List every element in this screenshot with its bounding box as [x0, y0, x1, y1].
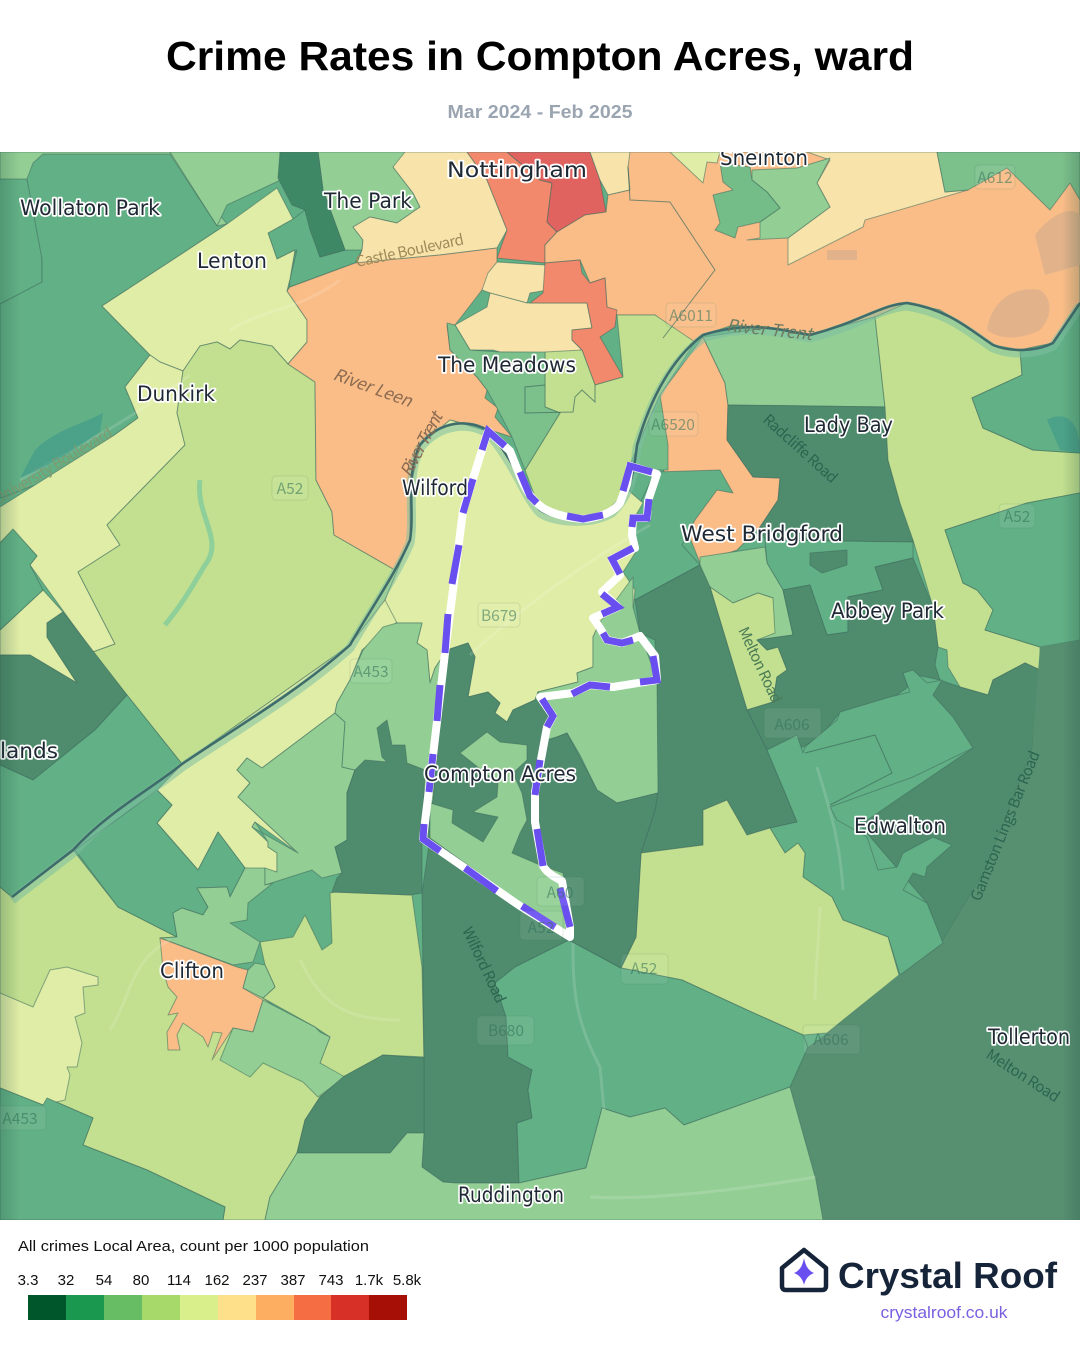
place labels: Clifton [160, 959, 224, 983]
place labels: Tollerton [987, 1025, 1070, 1049]
water: lakes and streams [20, 413, 1080, 625]
road and river names: Radcliffe Road [759, 409, 843, 488]
place labels: Abbey Park [831, 599, 945, 623]
website url: crystalroof.co.uk [880, 1304, 1008, 1322]
road badges: A612 [977, 166, 1013, 188]
road badges: A52 [528, 916, 554, 938]
road badges: A606 [774, 713, 810, 735]
road and river names: Wilford Road [457, 923, 511, 1006]
ward boundary: Compton Acres [423, 431, 657, 937]
legend value labels: 114 [167, 1272, 191, 1289]
road badges: A52 [277, 477, 303, 499]
road badges: A6011 [669, 304, 713, 326]
legend title: All crimes Local Area, count per 1000 population [18, 1238, 369, 1255]
place labels: Wilford [402, 476, 468, 500]
legend value labels [18, 1272, 422, 1289]
road badges: A606 [813, 1028, 849, 1050]
place labels [0, 146, 1070, 1207]
icon: house with star [782, 1250, 826, 1290]
place labels: Lady Bay [804, 413, 893, 437]
road and river names: Castle Boulevard [354, 228, 466, 272]
title: Crime Rates in Compton Acres, ward [166, 33, 914, 79]
river Trent [12, 303, 1080, 900]
place labels: Lenton [197, 249, 267, 273]
road badges: A453 [2, 1107, 38, 1129]
road and river names: River Trent [725, 311, 816, 345]
darker industrial patches [827, 211, 1080, 338]
road badges: A453 [353, 660, 389, 682]
road badges: B680 [488, 1019, 524, 1041]
legend value labels: 54 [96, 1272, 112, 1289]
place labels: Edwalton [854, 814, 946, 838]
road badges: A52 [1004, 505, 1030, 527]
road badges [0, 165, 1035, 1130]
place labels: West Bridgford [681, 522, 843, 546]
legend value labels: 162 [204, 1272, 230, 1289]
legend value labels: 3.3 [18, 1272, 38, 1289]
place labels: The Park [323, 189, 413, 213]
legend value labels: 1.7k [355, 1272, 384, 1289]
place labels: Nottingham [447, 158, 587, 182]
place labels: Dunkirk [137, 382, 216, 406]
road and river names: River Trent [392, 405, 448, 480]
legend value labels: 387 [280, 1272, 306, 1289]
place labels: Sneinton [720, 146, 808, 170]
logo: Crystal Roof [782, 1250, 1058, 1296]
legend value labels: 5.8k [393, 1272, 422, 1289]
road and river names: Melton Road [733, 623, 787, 706]
place labels: Ruddington [458, 1183, 564, 1207]
legend value labels: 237 [242, 1272, 268, 1289]
subtitle: date range: Mar 2024 - Feb 2025 [448, 102, 632, 122]
choropleth map panel [0, 146, 1080, 1220]
faint streets [20, 280, 843, 1198]
road badges: A52 [631, 957, 657, 979]
logo: Crystal Roof: Crystal Roof [838, 1255, 1058, 1296]
legend colour scale [28, 1295, 407, 1320]
legend value labels: 80 [133, 1272, 149, 1289]
road and river names: Melton Road [982, 1044, 1064, 1107]
road and river names [0, 228, 1064, 1107]
legend value labels: 743 [318, 1272, 344, 1289]
road badges: A60 [547, 881, 573, 903]
legend value labels: 32 [58, 1272, 74, 1289]
road badges: B679 [481, 604, 517, 626]
road and river names: River Leen [330, 360, 417, 412]
place labels: Compton Acres [424, 762, 576, 786]
place labels: lands [0, 739, 58, 763]
road badges: A6520 [651, 413, 695, 435]
ward sub-boundary outlines [525, 167, 892, 805]
place labels: Wollaton Park [20, 196, 161, 220]
road and river names: Gamston Lings Bar Road [965, 748, 1045, 904]
place labels: The Meadows [437, 353, 576, 377]
